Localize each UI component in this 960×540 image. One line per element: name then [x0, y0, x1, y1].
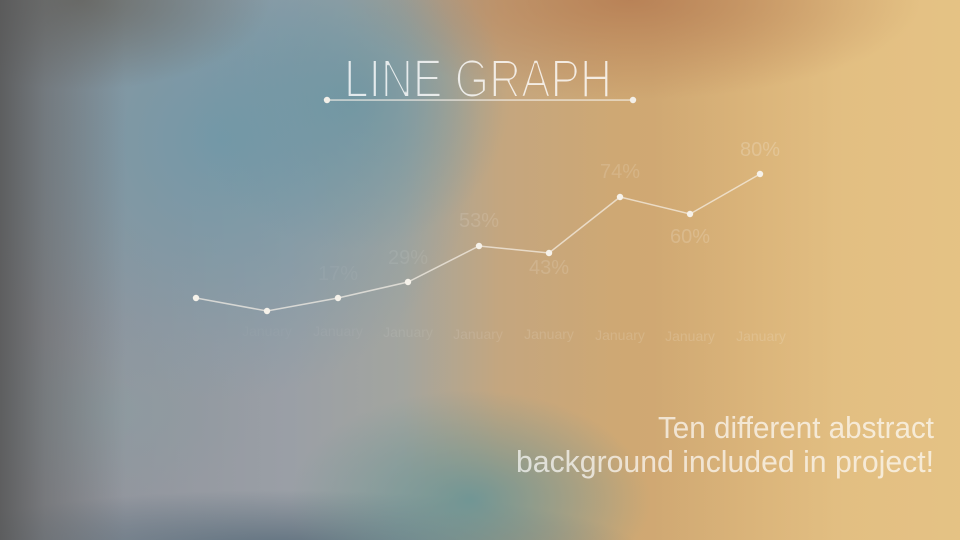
caption: Ten different abstract	[658, 410, 934, 445]
percentage labels: 53%	[459, 210, 499, 232]
month labels: January	[453, 326, 503, 342]
month labels: January	[665, 328, 715, 344]
percentage labels: 80%	[740, 139, 780, 161]
data points	[193, 171, 763, 314]
month labels: January	[313, 323, 363, 339]
percentage labels	[318, 139, 780, 285]
month labels	[242, 323, 786, 344]
data line	[196, 174, 760, 311]
title: LINE GRAPH	[344, 49, 612, 109]
percentage labels: 60%	[670, 226, 710, 248]
month labels: January	[242, 323, 292, 339]
percentage labels: 29%	[388, 247, 428, 269]
percentage labels: 74%	[600, 161, 640, 183]
caption	[516, 410, 934, 479]
title underline	[324, 97, 636, 103]
month labels: January	[383, 324, 433, 340]
month labels: January	[736, 328, 786, 344]
line chart	[193, 139, 786, 344]
percentage labels: 17%	[318, 263, 358, 285]
caption: background included in project!	[516, 444, 934, 479]
month labels: January	[595, 327, 645, 343]
percentage labels: 43%	[529, 257, 569, 279]
month labels: January	[524, 326, 574, 342]
